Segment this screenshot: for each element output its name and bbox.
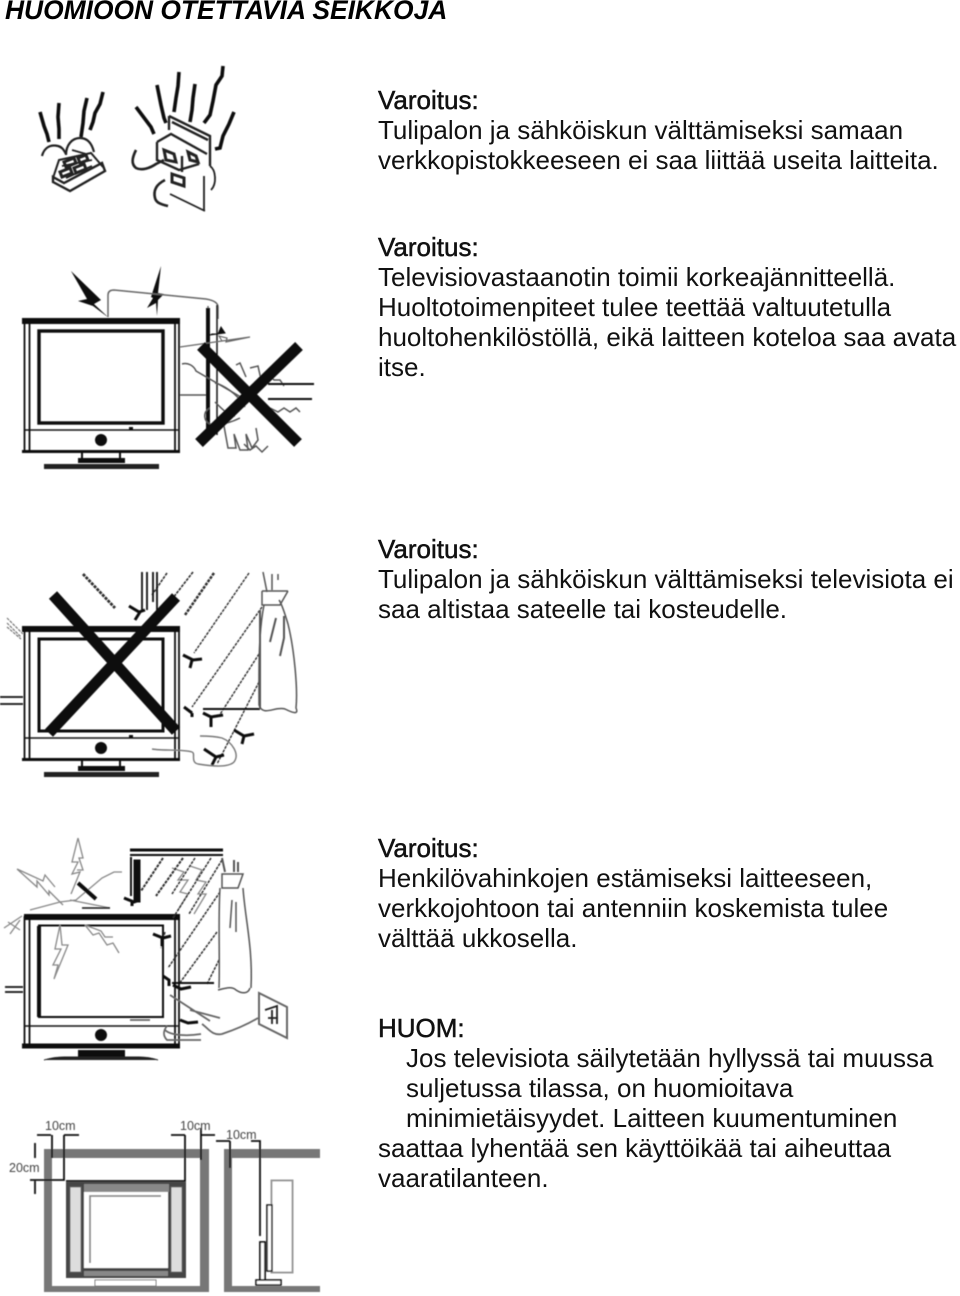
illustration: do not open the casing xyxy=(22,266,314,469)
television xyxy=(22,318,180,469)
icon: overloaded power strip xyxy=(40,92,105,191)
text block: note: saattaa lyhentää sen käyttöikää tai aiheuttaa xyxy=(378,1133,891,1163)
clearance labels: 10cm xyxy=(45,1119,76,1133)
text block: warning 2: huoltohenkilöstöllä, eikä laitteen koteloa saa avata xyxy=(378,322,956,352)
icon: overloaded wall socket xyxy=(133,66,234,211)
text block: warning 2: Varoitus: xyxy=(378,232,479,262)
text block: warning 2: Televisiovastaanotin toimii korkeajännitteellä. xyxy=(378,262,895,292)
front view clearance xyxy=(30,1128,215,1292)
prohibition cross xyxy=(199,346,299,443)
text block: warning 2: Huoltotoimenpiteet tulee teettää valtuutetulla xyxy=(378,292,891,322)
cable left xyxy=(5,987,23,992)
rain and antenna xyxy=(78,850,223,1023)
television xyxy=(22,914,180,1060)
clearance labels: 20cm xyxy=(9,1161,40,1175)
text block: warning 3: Varoitus: xyxy=(378,534,479,564)
clearance labels: 10cm xyxy=(226,1128,257,1142)
curtain xyxy=(259,572,297,713)
text block: warning 4: Henkilövahinkojen estämiseksi laitteeseen, xyxy=(378,863,872,893)
text block: warning 4: välttää ukkosella. xyxy=(378,923,577,953)
curtain xyxy=(218,858,251,993)
text block: note: suljetussa tilassa, on huomioitava xyxy=(406,1073,793,1103)
clearance labels xyxy=(9,1119,257,1175)
text block: warning 3 xyxy=(378,534,954,624)
text block: warning 1 xyxy=(378,85,939,175)
illustration: minimum clearances xyxy=(9,1119,320,1292)
lightning bolts and antenna xyxy=(71,266,250,441)
text block: note: HUOM: xyxy=(378,1013,465,1043)
antenna and droplets xyxy=(129,572,260,766)
text block: warning 1: Varoitus: xyxy=(378,85,479,115)
lightning outlines xyxy=(4,838,206,979)
text block: note: minimietäisyydet. Laitteen kuumentuminen xyxy=(406,1103,897,1133)
illustration: lightning storm xyxy=(4,838,287,1060)
illustration: no rain or moisture xyxy=(0,572,297,777)
text block: warning 4: verkkojohtoon tai antenniin koskemista tulee xyxy=(378,893,888,923)
cable left xyxy=(0,697,23,704)
clearance labels: 10cm xyxy=(180,1119,211,1133)
text block: warning 2: itse. xyxy=(378,352,426,382)
text block: note: Jos televisiota säilytetään hyllyssä tai muussa xyxy=(406,1043,933,1073)
hand and screwdriver xyxy=(180,363,300,452)
text block: warning 3: saa altistaa sateelle tai kosteudelle. xyxy=(378,594,787,624)
rain xyxy=(7,572,262,764)
text block: warning 4: Varoitus: xyxy=(378,833,479,863)
text block: warning 1: Tulipalon ja sähköiskun välttämiseksi samaan xyxy=(378,115,903,145)
text block: warning 4 xyxy=(378,833,888,953)
text block: warning 3: Tulipalon ja sähköiskun välttämiseksi televisiota ei xyxy=(378,564,954,594)
television xyxy=(22,626,180,777)
side view clearance xyxy=(216,1141,320,1292)
prohibition cross xyxy=(49,595,176,733)
text block: warning 2 xyxy=(378,232,956,382)
television xyxy=(66,1182,186,1286)
text block: warning 1: verkkopistokkeeseen ei saa liittää useita laitteita. xyxy=(378,145,939,175)
text block: note xyxy=(378,1013,934,1193)
wall outlet and cord xyxy=(130,993,287,1040)
text block: note: vaaratilanteen. xyxy=(378,1163,549,1193)
